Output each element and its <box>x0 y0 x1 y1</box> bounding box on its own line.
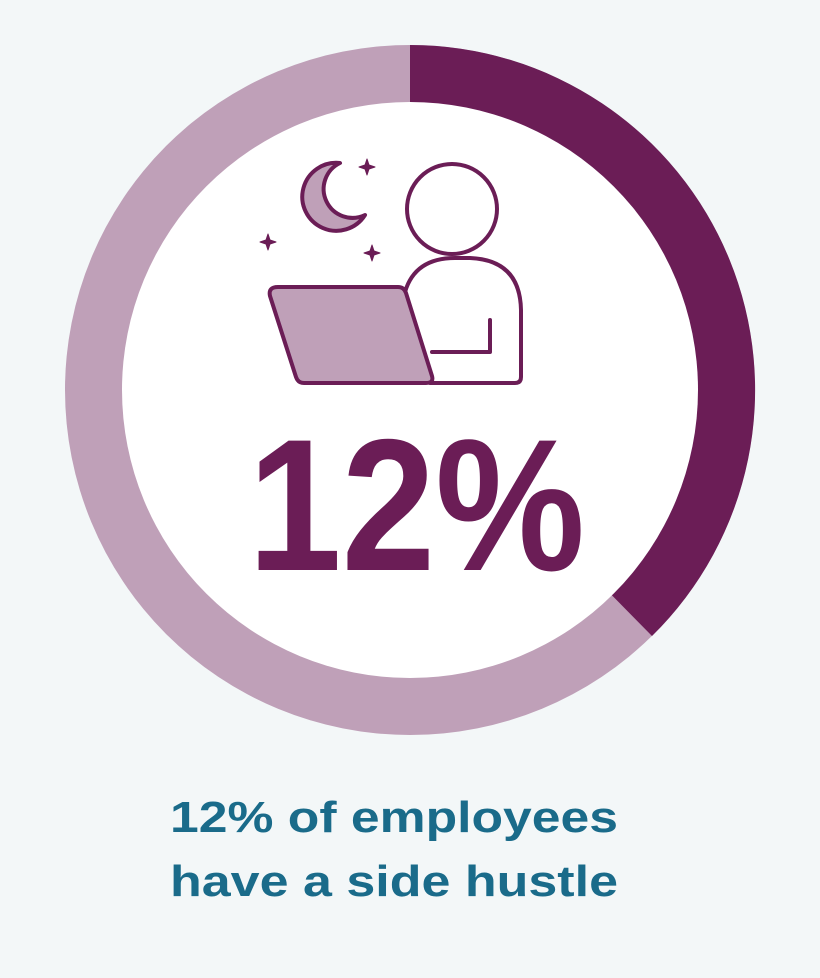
icon: person at laptop at night <box>260 159 521 383</box>
icon: moon <box>302 163 365 231</box>
caption: 12% of employees <box>170 793 618 842</box>
big number: 12% <box>248 400 585 610</box>
caption <box>170 793 618 906</box>
ring background <box>65 45 755 735</box>
icon: stars <box>260 159 380 261</box>
icon: laptop <box>270 287 432 383</box>
caption: have a side hustle <box>170 857 618 906</box>
icon: head <box>407 164 497 254</box>
icon: body <box>405 258 521 383</box>
